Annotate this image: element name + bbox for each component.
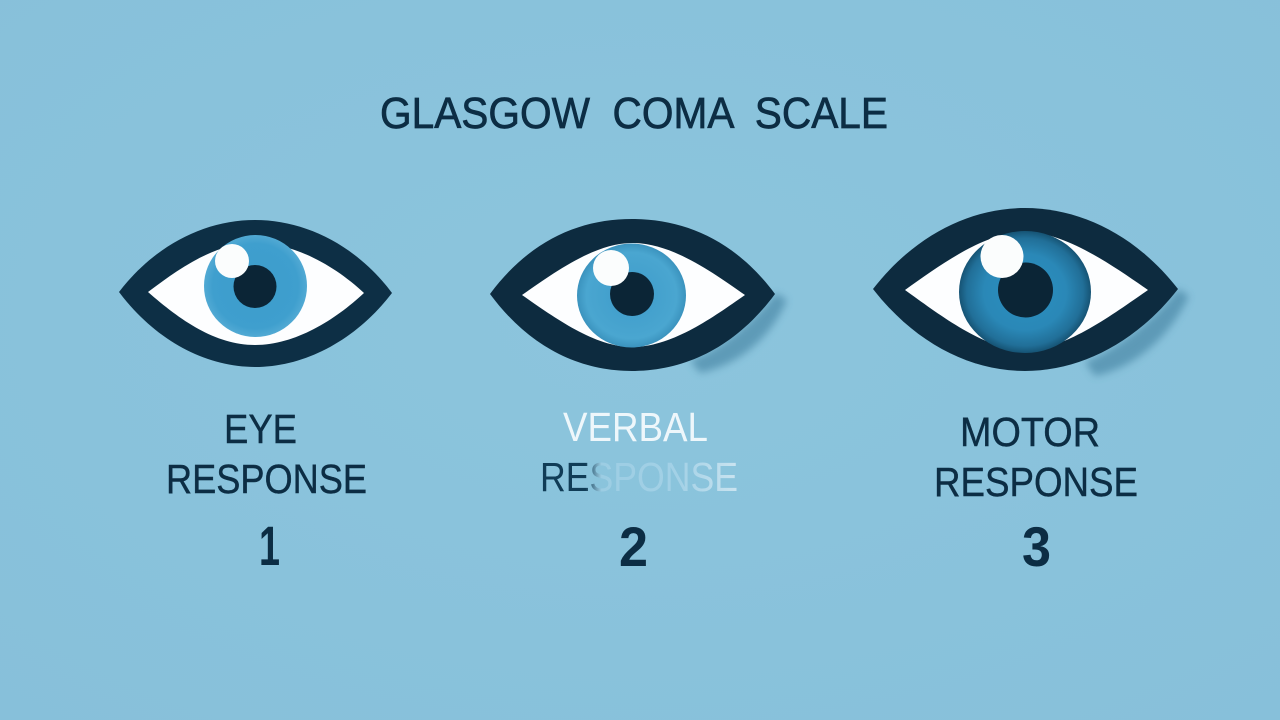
title: GLASGOW COMA SCALE xyxy=(380,89,888,138)
icon: motor response eye xyxy=(873,208,1189,376)
number 2: 2 xyxy=(619,515,648,578)
label: verbal response: RESPONSE xyxy=(540,454,738,500)
label: motor response: RESPONSE xyxy=(934,459,1138,505)
label: motor response xyxy=(934,409,1138,505)
icon: eye response eye xyxy=(119,220,392,367)
number 1: 1 xyxy=(259,514,280,577)
number 3: 3 xyxy=(1022,515,1051,578)
label: verbal response xyxy=(540,404,738,500)
icon: verbal response eye xyxy=(490,219,787,373)
label: eye response: RESPONSE xyxy=(166,456,367,502)
label: motor response: MOTOR xyxy=(960,409,1100,455)
label: eye response xyxy=(166,406,367,502)
label: eye response: EYE xyxy=(224,406,297,452)
label: verbal response: VERBAL xyxy=(563,404,708,450)
